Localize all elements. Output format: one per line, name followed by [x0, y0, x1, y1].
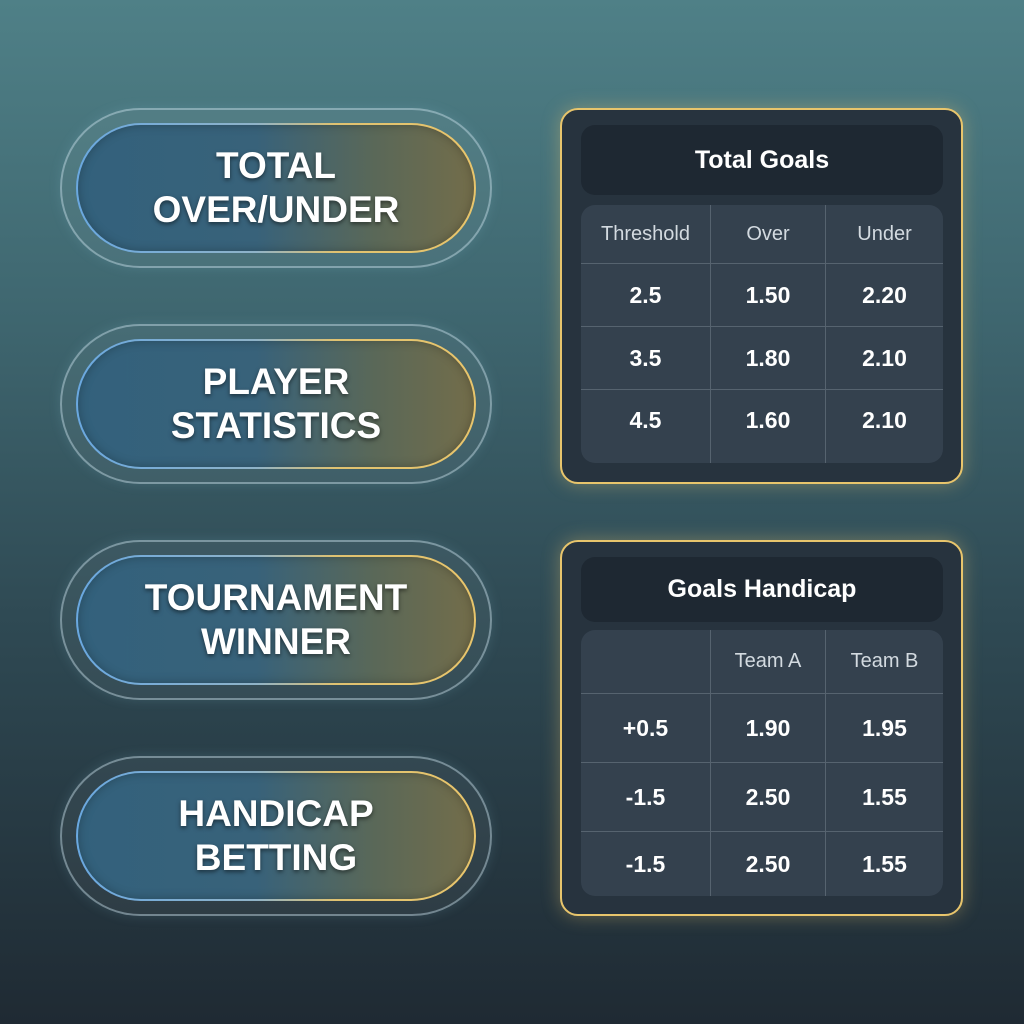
table: handicap odds: 1.55: [862, 850, 907, 876]
heading: goals handicap: [581, 557, 943, 622]
pill: player statistics: PLAYER: [203, 361, 349, 402]
pill: tournament winner: TOURNAMENT: [145, 577, 407, 618]
table: total goals odds: [581, 205, 943, 463]
table: handicap odds: [581, 630, 943, 896]
table: handicap odds: -1.5: [626, 850, 665, 876]
heading: total goals: [581, 125, 943, 195]
table: total goals odds: 1.80: [746, 344, 790, 370]
table: total goals odds: 2.10: [862, 344, 907, 370]
table: total goals odds: 4.5: [630, 407, 661, 433]
pill: player statistics: STATISTICS: [171, 405, 381, 446]
pill: tournament winner: WINNER: [201, 621, 351, 662]
table: total goals odds: 2.20: [862, 282, 907, 308]
pill: player statistics: [60, 324, 492, 484]
panel: goals handicap table: [560, 540, 963, 916]
heading: total goals: Total Goals: [695, 146, 829, 174]
pill: handicap betting: HANDICAP: [178, 793, 374, 834]
pill: handicap betting: BETTING: [195, 837, 357, 878]
table: handicap odds: 1.95: [862, 714, 907, 740]
table: handicap odds: 1.55: [862, 784, 907, 810]
table: handicap odds: 2.50: [746, 784, 790, 810]
table: total goals odds: Threshold: [601, 222, 690, 244]
table: total goals odds: 1.60: [746, 407, 790, 433]
pill: total over/under: OVER/UNDER: [153, 189, 399, 230]
table: total goals odds: 2.5: [630, 282, 661, 308]
table: total goals odds: Under: [857, 222, 912, 244]
table: handicap odds: Team B: [851, 650, 918, 672]
pill: handicap betting: [60, 756, 492, 916]
table: total goals odds: Over: [746, 222, 790, 244]
pill: total over/under: TOTAL: [216, 145, 336, 186]
table: handicap odds: Team A: [735, 650, 801, 672]
pill: total over/under: [60, 108, 492, 268]
pill: tournament winner: [60, 540, 492, 700]
table: total goals odds: 3.5: [630, 344, 661, 370]
table: handicap odds: 2.50: [746, 850, 790, 876]
table: handicap odds: 1.90: [746, 714, 790, 740]
table: handicap odds: +0.5: [623, 714, 668, 740]
table: total goals odds: 1.50: [746, 282, 790, 308]
panel: total goals table: [560, 108, 963, 484]
table: total goals odds: 2.10: [862, 407, 907, 433]
table: handicap odds: -1.5: [626, 784, 665, 810]
heading: goals handicap: Goals Handicap: [668, 575, 856, 603]
